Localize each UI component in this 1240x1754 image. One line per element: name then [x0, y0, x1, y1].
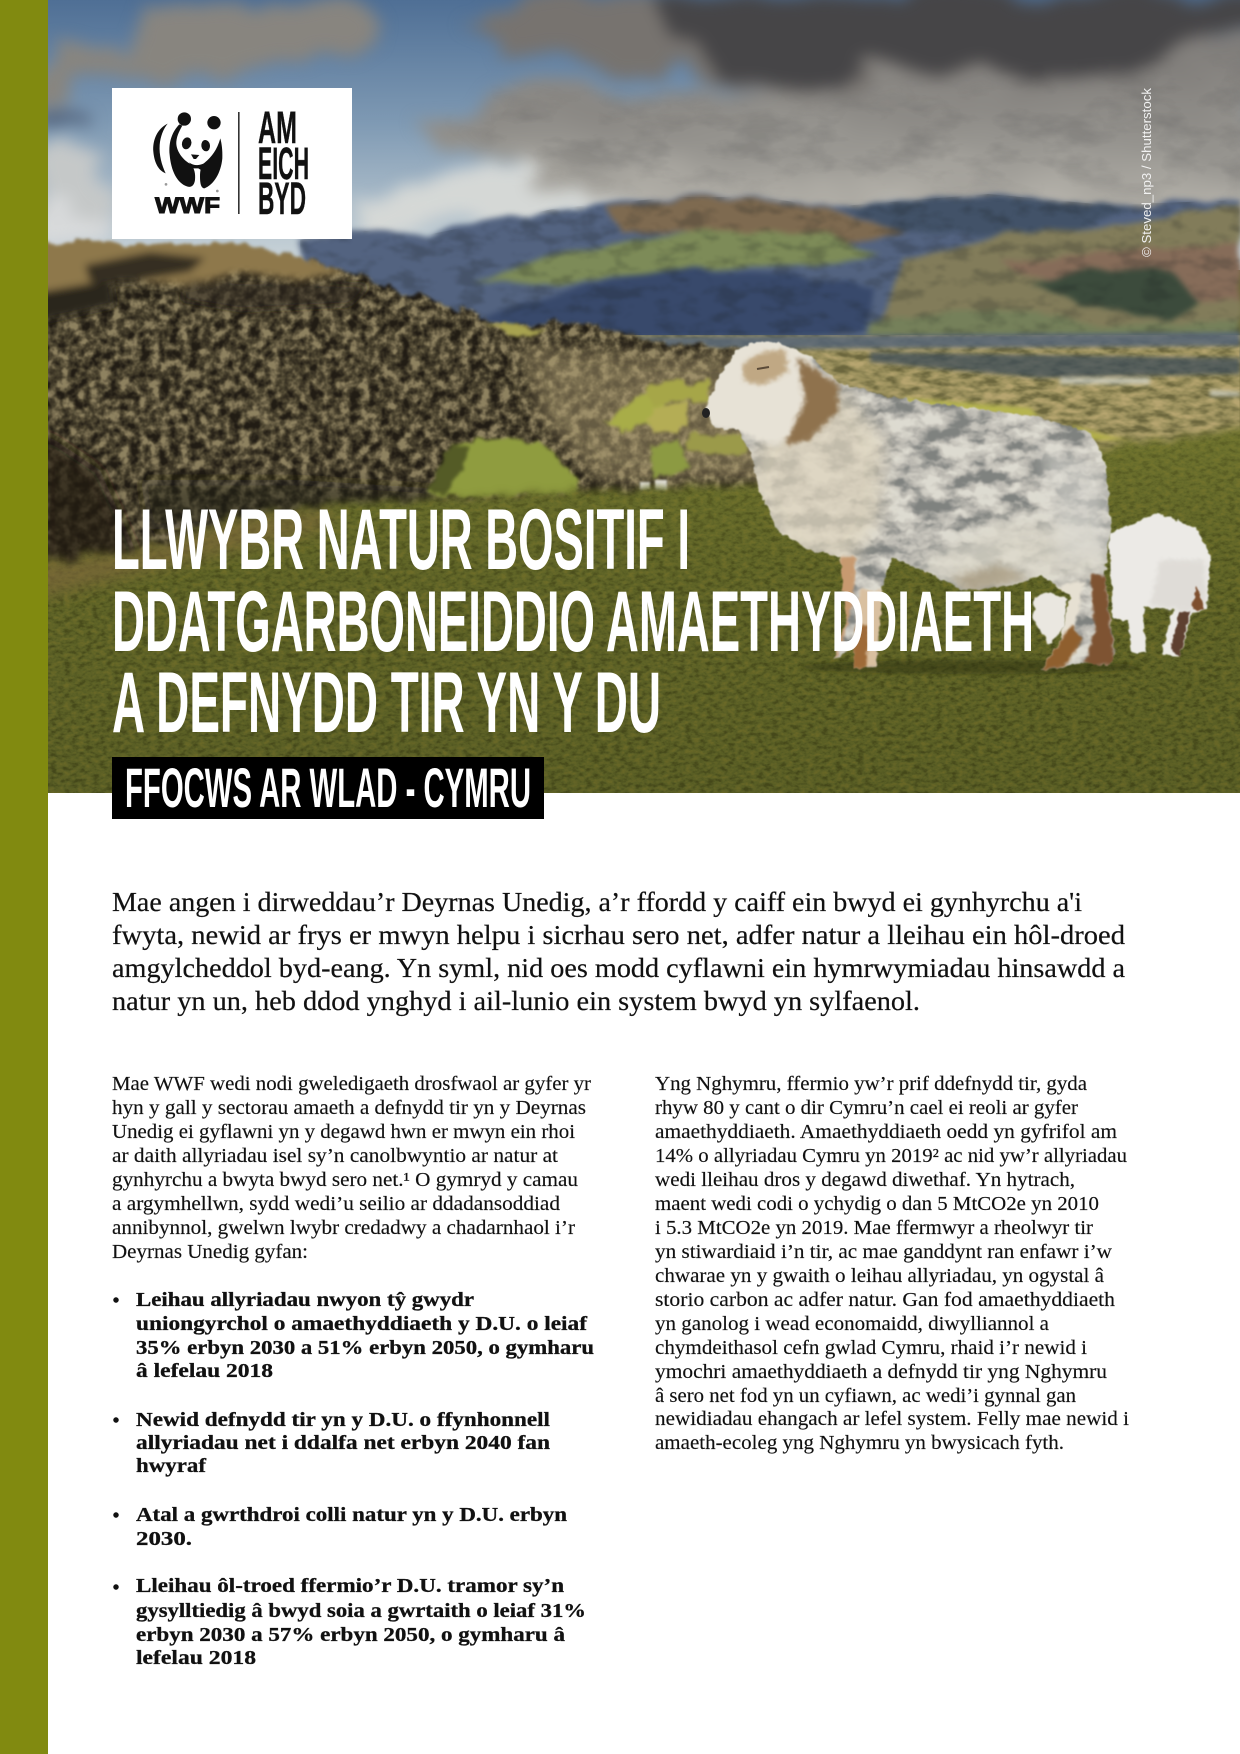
right column text: chwarae yn y gwaith o leihau allyriadau, yn ogystal â	[655, 1266, 1104, 1287]
right column text: amaethyddiaeth. Amaethyddiaeth oedd yn gyfrifol am	[655, 1122, 1117, 1143]
sidebar	[0, 0, 48, 1754]
subtitle banner	[112, 756, 544, 819]
bullet 2: allyriadau net i ddalfa net erbyn 2040 fan	[136, 1433, 550, 1454]
bullet 2	[113, 1410, 551, 1477]
bullet 3	[113, 1505, 567, 1550]
wooded hill	[40, 235, 800, 575]
bullet 4: Lleihau ôl-troed ffermio’r D.U. tramor sy’n	[136, 1576, 564, 1597]
left column text	[112, 1074, 592, 1263]
intro paragraph: amgylcheddol byd-eang. Yn syml, nid oes modd cyflawni ein hymrwymiadau hinsawdd a	[112, 953, 1125, 983]
bullet 2: Newid defnydd tir yn y D.U. o ffynhonnell	[136, 1410, 551, 1431]
bullet 3: Atal a gwrthdroi colli natur yn y D.U. erbyn	[136, 1505, 567, 1526]
intro paragraph: Mae angen i dirweddau’r Deyrnas Unedig, a’r ffordd y caiff ein bwyd ei gynhyrchu a'i	[112, 887, 1082, 917]
intro paragraph	[112, 887, 1126, 1016]
right column text: amaeth-ecoleg yng Nghymru yn bwysicach fyth.	[655, 1433, 1064, 1454]
bullet list	[113, 1290, 594, 1669]
bullet 1	[113, 1290, 594, 1382]
right column text: 14% o allyriadau Cymru yn 2019² ac nid yw’r allyriadau	[655, 1146, 1127, 1167]
right column text: yn ganolog i wead economaidd, diwylliannol a	[655, 1314, 1049, 1335]
right column text: maent wedi codi o ychydig o dan 5 MtCO2e yn 2010	[655, 1194, 1099, 1215]
bullet 1: Leihau allyriadau nwyon tŷ gwydr	[136, 1290, 474, 1311]
sheep: lamb	[1034, 513, 1210, 657]
right column text: rhyw 80 y cant o dir Cymru’n cael ei reoli ar gyfer	[655, 1098, 1079, 1119]
left column text: ar daith allyriadau isel sy’n canolbwyntio ar natur at	[112, 1146, 559, 1167]
title	[112, 492, 1034, 751]
intro paragraph: natur yn un, heb ddod ynghyd i ail-lunio ein system bwyd yn sylfaenol.	[112, 986, 920, 1016]
bullet 3: 2030.	[136, 1529, 192, 1550]
tagline: BYD	[258, 173, 306, 224]
valley floor	[624, 330, 1240, 454]
title: A DEFNYDD TIR YN Y DU	[112, 655, 661, 751]
right column text	[655, 1074, 1130, 1454]
icon: WWF panda	[153, 112, 222, 192]
logo divider	[238, 112, 240, 214]
left column text: Mae WWF wedi nodi gweledigaeth drosfwaol ar gyfer yr	[112, 1074, 592, 1095]
left column text: a argymhellwn, sydd wedi’u seilio ar ddadansoddiad	[112, 1194, 560, 1215]
right column text: ymochri amaethyddiaeth a defnydd tir yng Nghymru	[655, 1362, 1107, 1383]
right column text: newidiadau ehangach ar lefel system. Felly mae newid i	[655, 1409, 1130, 1430]
intro paragraph: fwyta, newid ar frys er mwyn helpu i sicrhau sero net, adfer natur a lleihau ein hôl-droed	[112, 920, 1126, 950]
bullet 1: â lefelau 2018	[136, 1361, 273, 1382]
right column text: chymdeithasol cefn gwlad Cymru, rhaid i’r newid i	[655, 1338, 1088, 1359]
right column text: i 5.3 MtCO2e yn 2019. Mae ffermwyr a rheolwyr tir	[655, 1218, 1094, 1239]
bullet 4: lefelau 2018	[136, 1648, 256, 1669]
left column text: Unedig ei gyflawni yn y degawd hwn er mwyn ein rhoi	[112, 1122, 576, 1143]
subtitle banner: FFOCWS AR WLAD - CYMRU	[125, 756, 531, 819]
right column text: wedi lleihau dros y degawd diwethaf. Yn hytrach,	[655, 1170, 1075, 1191]
left column text: Deyrnas Unedig gyfan:	[112, 1242, 308, 1263]
tagline	[258, 102, 309, 224]
right column text: â sero net fod yn un cyfiawn, ac wedi’i gynnal gan	[655, 1386, 1076, 1407]
grass foreground	[30, 420, 1240, 800]
tagline: AM	[258, 102, 297, 153]
bullet 4: gysylltiedig â bwyd soia a gwrtaith o leiaf 31%	[136, 1601, 586, 1622]
sheep: ewe	[700, 335, 1140, 675]
photo credit: © Steved_np3 / Shutterstock	[1140, 87, 1154, 257]
sky and clouds	[48, 0, 1240, 270]
bullet 4: erbyn 2030 a 57% erbyn 2050, o gymharu â	[136, 1625, 565, 1646]
right column text: Yng Nghymru, ffermio yw’r prif ddefnydd tir, gyda	[655, 1074, 1087, 1095]
distant mountains	[300, 190, 1240, 360]
bullet 4	[113, 1576, 586, 1669]
bullet 2: hwyraf	[136, 1456, 207, 1477]
logo panel: WWF Am Eich Byd: EICH	[258, 138, 309, 189]
right column text: storio carbon ac adfer natur. Gan fod amaethyddiaeth	[655, 1290, 1115, 1311]
title: LLWYBR NATUR BOSITIF I	[112, 492, 690, 588]
left column text: gynhyrchu a bwyta bwyd sero net.¹ O gymryd y camau	[112, 1170, 578, 1191]
right column text: yn stiwardiaid i’n tir, ac mae ganddynt ran enfawr i’w	[655, 1242, 1112, 1263]
bullet 1: 35% erbyn 2030 a 51% erbyn 2050, o gymharu	[136, 1338, 594, 1359]
left column text: hyn y gall y sectorau amaeth a defnydd tir yn y Deyrnas	[112, 1098, 586, 1119]
left column text: annibynnol, gwelwn lwybr credadwy a chadarnhaol i’r	[112, 1218, 576, 1239]
panel: hero photograph of Welsh hillside with sheep	[30, 0, 1240, 800]
logo panel: WWF Am Eich Byd	[112, 88, 352, 239]
WWF wordmark: WWF	[155, 193, 220, 218]
bullet 1: uniongyrchol o amaethyddiaeth y D.U. o leiaf	[136, 1314, 588, 1335]
